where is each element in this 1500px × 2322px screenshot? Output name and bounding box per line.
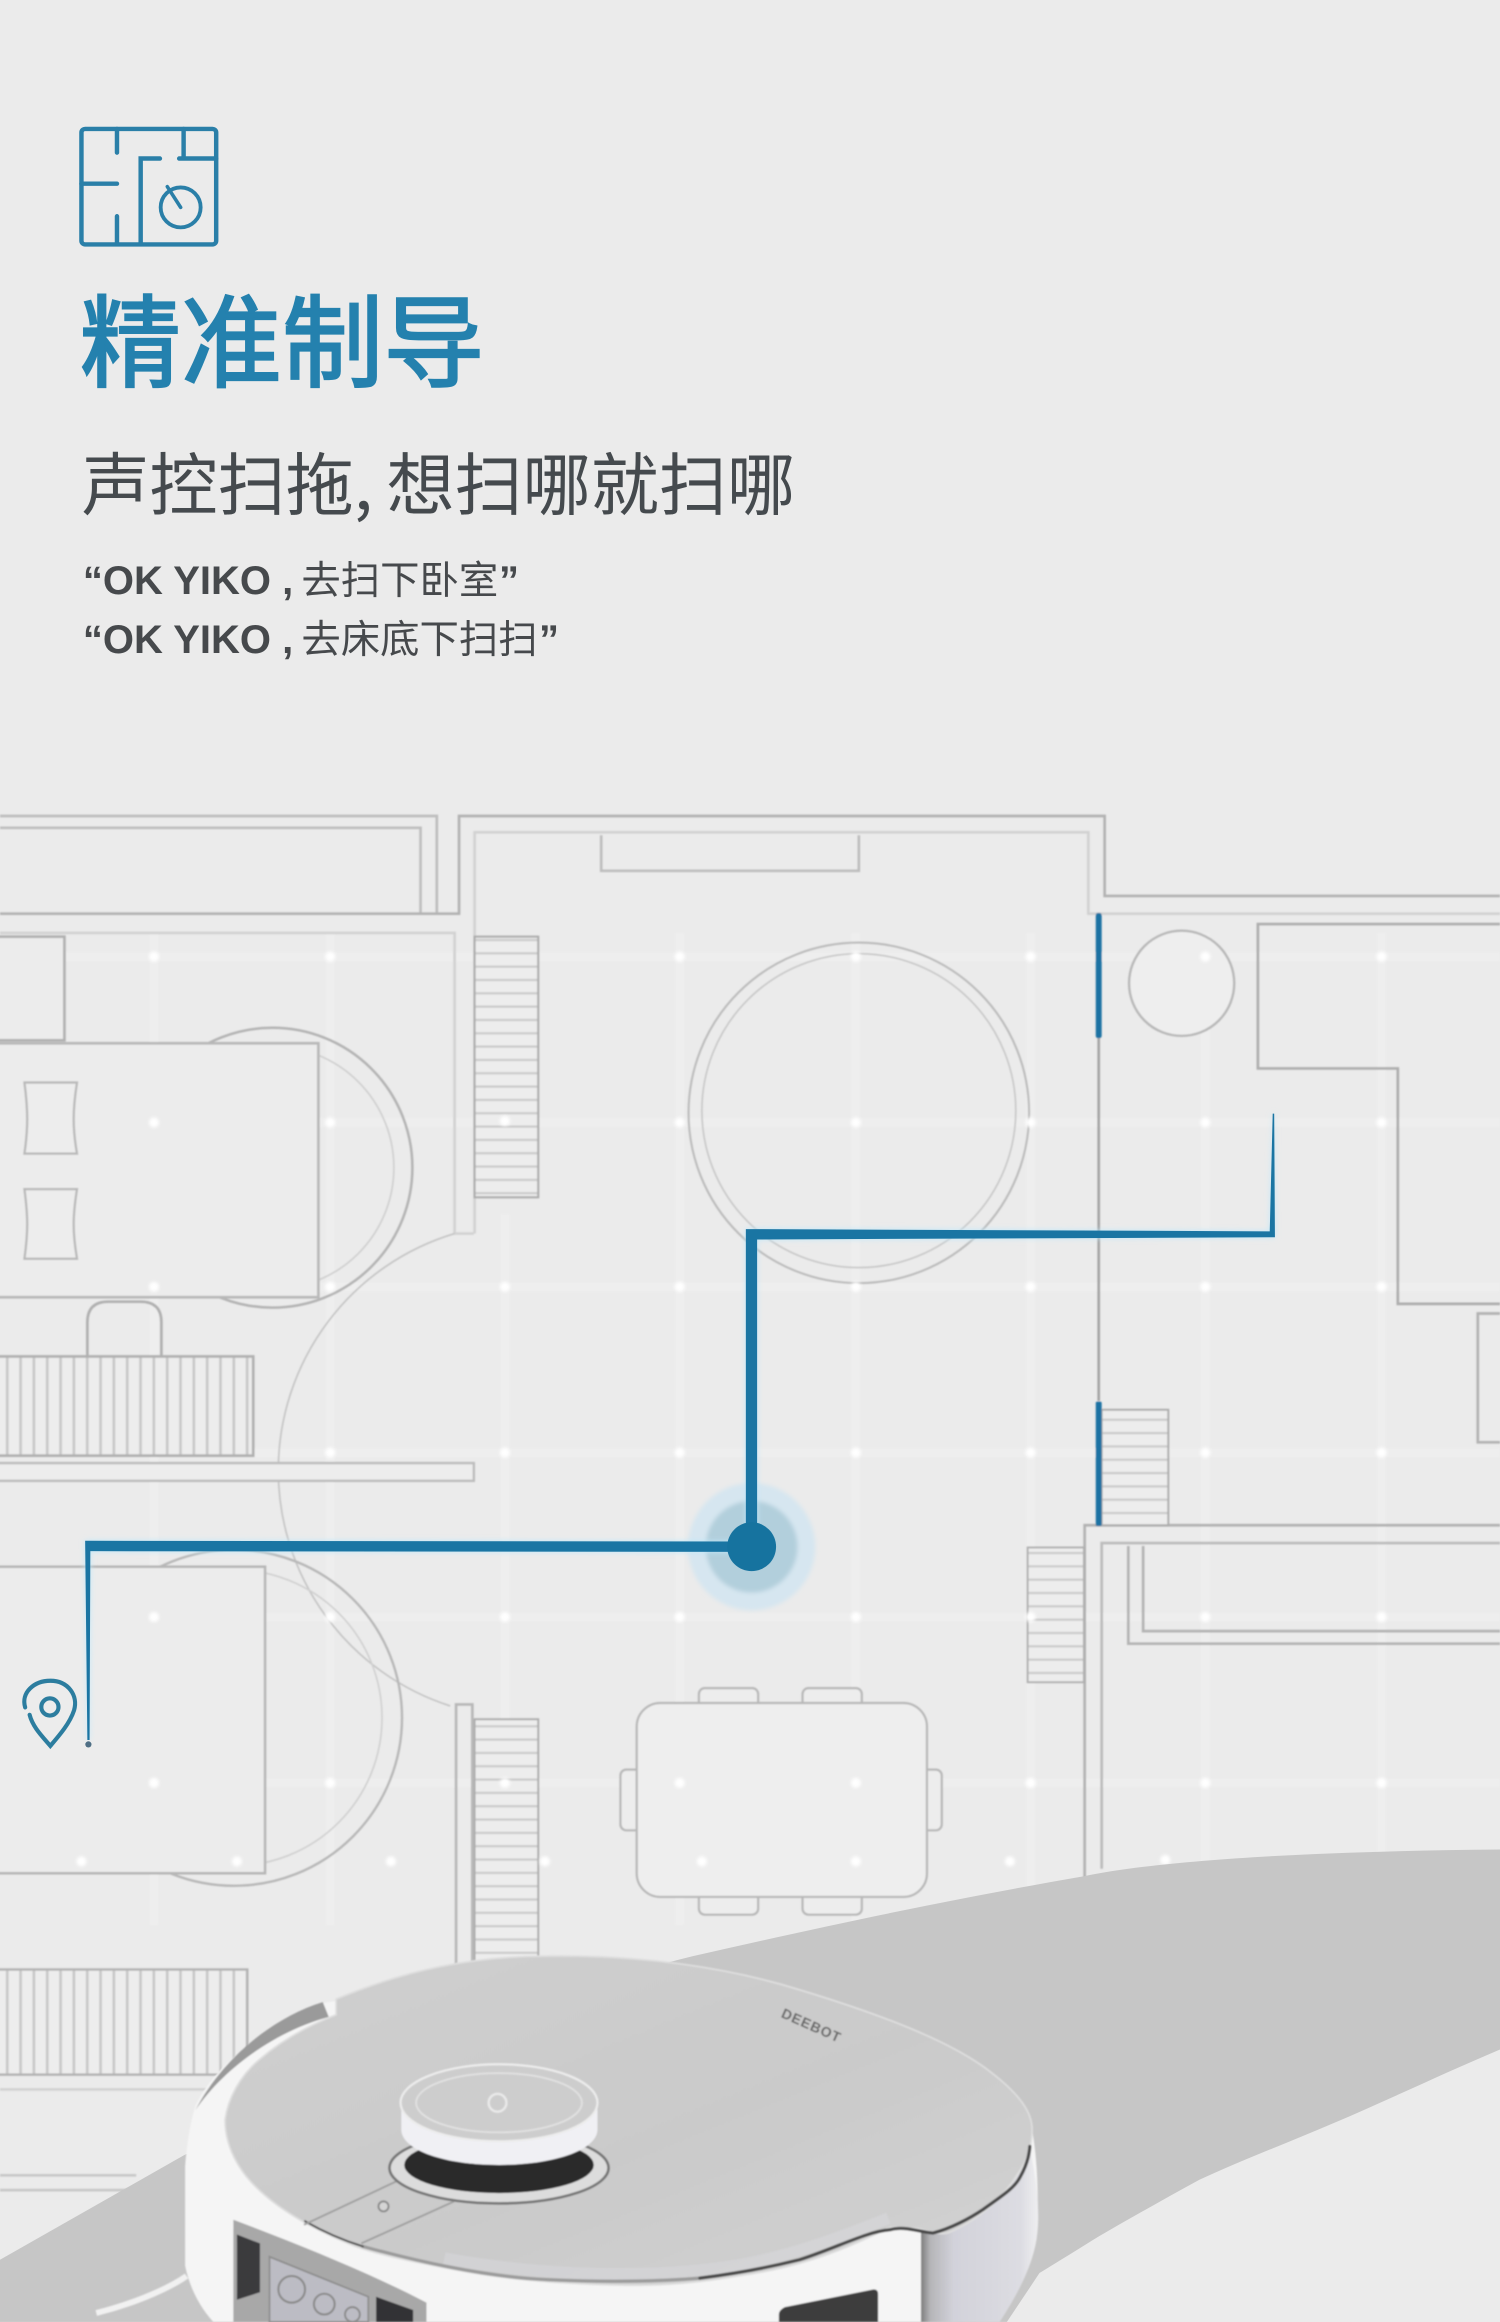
robot body	[185, 1984, 1038, 2322]
round rug	[689, 943, 1029, 1283]
icon: location pin	[24, 1681, 75, 1746]
left bumper rim	[195, 2002, 329, 2110]
stool and bench	[0, 1302, 253, 1456]
large door arc	[278, 1234, 455, 1706]
front sensor window	[779, 2289, 878, 2322]
voice command examples: “OK YIKO ,	[83, 559, 293, 603]
plate lower bevel	[444, 2218, 888, 2274]
voice command examples	[83, 549, 559, 665]
stairs: left upper	[475, 937, 538, 1197]
robot vacuum	[96, 1956, 1038, 2322]
right side panel	[921, 2146, 1038, 2322]
brand mark: DEEBOT	[779, 2005, 844, 2046]
position halo	[688, 1483, 815, 1610]
subtitle: 想扫哪就扫哪	[386, 430, 795, 529]
subtitle: 声控扫拖,	[81, 430, 373, 529]
route path	[85, 1114, 1275, 1748]
plate rim	[305, 2146, 1030, 2281]
dining table with chairs	[620, 1688, 942, 1915]
stairs: left lower	[475, 1719, 538, 1971]
nightstand	[0, 937, 64, 1040]
voice command examples: “OK YIKO ,	[83, 618, 293, 662]
voice command examples: 去扫下卧室	[301, 549, 498, 606]
shelf	[0, 1463, 474, 1481]
lidar turret	[389, 2064, 609, 2203]
current position marker	[727, 1522, 776, 1571]
title: 精准制导	[80, 262, 484, 408]
lower bed	[0, 1550, 402, 1886]
front display panel	[233, 2220, 426, 2322]
upper bed	[0, 1028, 412, 1308]
stairs: centre right	[1028, 1547, 1084, 1682]
bench lower	[0, 1969, 247, 2075]
floor plan	[0, 816, 1500, 2190]
round side table	[1129, 931, 1234, 1036]
grey sweep behind robot	[0, 1850, 1500, 2322]
voice command examples: ”	[539, 618, 559, 662]
walls	[0, 816, 1500, 2190]
silver top plate	[225, 1956, 1032, 2285]
voice command examples: 去床底下扫扫	[301, 608, 538, 665]
blue wall segments	[1096, 913, 1102, 1526]
grid nodes	[76, 952, 1387, 1866]
control strip	[304, 2181, 454, 2243]
power cable	[96, 2276, 187, 2313]
icon: floor plan with timer	[81, 129, 216, 244]
stairs: right upper	[1102, 1410, 1168, 1525]
voice command examples: ”	[499, 559, 519, 603]
